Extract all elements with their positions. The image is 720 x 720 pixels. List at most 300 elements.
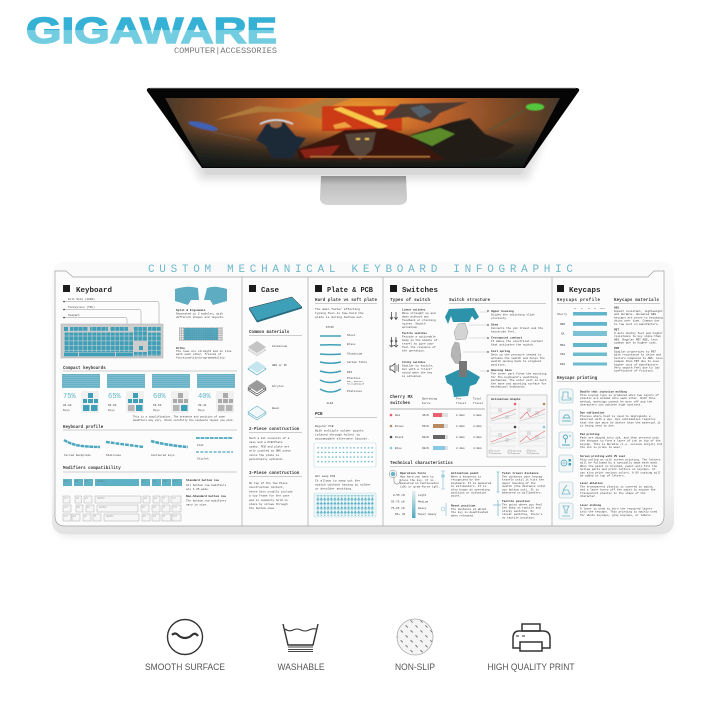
compact size 65 percent: Keys — [108, 409, 115, 412]
keycap materials text: Impact resistant, lightweight — [614, 309, 663, 313]
regular PCB — [314, 424, 376, 467]
switch parts legend: The inner part forms the mounting — [491, 372, 547, 376]
Cherry MX table: Cherry MX — [390, 395, 413, 400]
layout labels: Tenkeyless (TKL) — [68, 305, 95, 309]
ortho keyboard: Ortho — [176, 346, 185, 350]
text: 2-piece: potentially optional. — [249, 457, 284, 461]
tactile switch — [390, 331, 438, 352]
ortho keyboard: The rows are straight and in line — [176, 349, 232, 353]
heading: plate and PCB — [315, 285, 373, 295]
graph legend: position — [532, 453, 539, 455]
icon: smooth surface — [168, 620, 202, 654]
double shot injection molding: plastic are molded onto each other. With this — [580, 396, 656, 400]
total travel distance: you bottom out). It is — [502, 487, 539, 491]
hot swap PCB: Hot swap PCB — [315, 475, 335, 478]
heading: PCB — [315, 413, 377, 418]
laser ablation: and a laser burns off the paint to expose the — [580, 488, 656, 492]
bottom row notes: The bottom row modifiers — [186, 498, 227, 502]
standard bottom row: Menu — [163, 480, 167, 482]
graph: black — [490, 426, 516, 446]
reset position: Reset position — [451, 504, 476, 508]
Cherry MX table: Operating — [422, 396, 437, 400]
pad printing: Pads are dipped into ink, and then pressed onto — [580, 436, 659, 440]
case illustration — [249, 297, 302, 322]
non-standard row B: Win — [153, 506, 156, 508]
linear switch: noises. Smooth — [402, 322, 426, 326]
reset position: when released. — [451, 513, 474, 517]
Cherry MX table: 4.0mm — [473, 414, 482, 417]
activation point: Activation point — [451, 471, 479, 475]
compact size 60 percent — [153, 391, 189, 413]
tactile switch: Provide a noticeable — [402, 334, 436, 338]
force scale: 55-75 cN — [391, 500, 405, 504]
operation force: Operation force — [400, 471, 426, 475]
Cherry MX table: Travel — [473, 401, 483, 405]
plate stiffness chart: STIFF — [326, 326, 335, 329]
Cherry MX table: Brown — [395, 425, 404, 428]
screen printing with UV coat: will be followed by a specially made mesh mask. — [580, 461, 659, 465]
heading: 3-piece construction — [249, 471, 302, 476]
bottom row notes: Non-Standard bottom row — [186, 494, 226, 498]
graph: blue — [519, 426, 545, 446]
keycap materials text: POM — [614, 347, 619, 350]
text: 2-piece: combo. PCB and plate are — [249, 444, 290, 448]
keycap materials text: ABS. Regular PBT ABS, less — [614, 337, 658, 341]
Cherry MX table: 2.0mm — [456, 414, 465, 417]
force scale: 75-95 cN — [391, 507, 405, 510]
heading: 2-piece construction — [249, 427, 302, 432]
feature: washable — [278, 624, 324, 672]
pad printing — [559, 432, 663, 449]
non-standard row A: Win — [76, 498, 79, 500]
switch parts legend: It makes the electrical contact — [491, 339, 543, 343]
text: plate intro: plate is during bottom out. — [315, 315, 364, 319]
monitor with game wallpaper — [147, 88, 579, 205]
heading: case — [249, 285, 280, 295]
split ergonomic keyboard: different shapes and layouts. — [176, 315, 225, 319]
Cherry MX table: 55cN — [422, 425, 429, 428]
heading: plate and PCB: Plate & PCB — [327, 287, 373, 295]
linear switch: actuation. — [402, 325, 419, 329]
text: 3-piece: and is commonly held in — [249, 498, 288, 502]
compact size 60 percent: 60% — [153, 393, 166, 401]
main title: CUSTOM MECHANICAL KEYBOARD INFOGRAPHIC — [148, 264, 573, 276]
non-standard row C: Win — [153, 516, 156, 518]
keycap profile chart: Cherry — [557, 312, 567, 316]
tactile switch: bump in the middle of — [402, 338, 438, 342]
heading: hard vs soft plate: Hard plate vs soft plate — [315, 298, 377, 303]
laser etching — [559, 503, 658, 519]
material: acrylic: Acrylic — [272, 384, 284, 388]
material: acrylic — [248, 380, 284, 396]
keycap profile chart: R3 — [588, 308, 590, 310]
non-standard row C: Spacebar — [106, 516, 114, 518]
text: 2-piece: Such a kit consists of a — [249, 436, 290, 440]
keycap materials text: keycaps are prone to becoming — [614, 315, 663, 319]
total travel distance — [496, 471, 546, 494]
double shot injection molding: method, markings cannot be worn off and the — [580, 399, 652, 403]
screen printing with UV coat: hollow parts and print letters on keycaps. It — [580, 467, 656, 471]
laser etching: A laser is used to burn the required layers — [580, 506, 652, 510]
Cherry MX table: 2.0mm — [456, 425, 465, 428]
Cherry MX table: Force — [422, 402, 431, 405]
heading: switches — [390, 285, 439, 295]
standard bottom row: Alt — [142, 480, 145, 482]
switch parts legend: Guides the switching slide — [491, 312, 535, 316]
plate stiffness chart — [320, 326, 367, 405]
bottom row notes: are 1.25 wide. — [186, 487, 210, 491]
keycap materials text: texture compared to ABS. Less — [614, 356, 663, 360]
compact size 40 percent: 39-41 — [198, 404, 207, 407]
switch parts legend: actuate the switch and helps the — [491, 356, 545, 360]
non-standard row A: Alt — [85, 496, 88, 500]
tactile position: sticky switches. On — [502, 509, 534, 513]
non-standard row C: Fn — [163, 516, 165, 518]
material: wood — [248, 406, 279, 420]
heading: keycaps materials: Keycaps materials — [614, 298, 659, 303]
linear switch: feedback or clicking — [402, 318, 436, 322]
tactile switch: feel the response of — [402, 345, 436, 349]
keycap profile chart: R1 — [574, 308, 576, 310]
non-standard row C: Ctrl — [173, 516, 177, 518]
hot swap PCB — [314, 475, 376, 517]
switch parts legend: mechanism. The outer part is both — [491, 378, 547, 382]
label: high quality print: HIGH QUALITY PRINT — [488, 662, 575, 672]
text: 2-piece: since the plate is — [249, 453, 280, 457]
text: plate intro: The main factor affecting — [315, 307, 360, 311]
switch parts legend: Connects the pin travel and the — [491, 326, 543, 330]
mat shadow — [56, 280, 670, 536]
Cherry MX table: 60cN — [422, 436, 429, 439]
keycap materials text: Similar properties to PBT — [614, 350, 656, 354]
keyboard profile illustrations: Flat — [197, 443, 204, 447]
label: non-slip: NON-SLIP — [395, 662, 435, 672]
graph: brown — [519, 403, 545, 423]
activation point: position or actuation — [451, 490, 487, 494]
screen printing with UV coat: can also print various colors. A UV coating will — [580, 470, 661, 474]
dye sublimation: Dye sublimation — [580, 410, 605, 414]
operation force — [389, 470, 440, 488]
hot swap PCB: It allows to swap out the — [315, 478, 360, 482]
Cherry MX table — [390, 395, 485, 450]
keycap materials text — [614, 306, 663, 373]
Cherry MX table: Travel — [456, 401, 466, 405]
reset position: the key is deactivated — [451, 510, 488, 514]
non-standard row B: Ctrl — [64, 506, 68, 508]
tactile position: linear switches, there's — [502, 512, 543, 516]
Cherry MX table: switches — [390, 401, 411, 406]
pad printing: Pad printing — [580, 432, 600, 436]
heading: 3-piece construction: 3-Piece construction — [249, 471, 300, 476]
keycap materials text: and durable. Uncoated ABS — [614, 312, 656, 316]
standard bottom row — [63, 479, 182, 486]
standard bottom row: Alt — [85, 480, 88, 482]
keycap materials text: A more chalky feel and higher — [614, 331, 663, 335]
text: plate intro: typing feel is how hard the — [315, 311, 364, 315]
standard bottom row: Win — [153, 480, 156, 482]
plate stiffness chart: Aluminium — [347, 352, 362, 356]
clicky switch — [390, 360, 434, 378]
graph legend — [489, 450, 539, 455]
regular PCB: accommodate alternate layouts. — [315, 436, 369, 440]
text: 3-piece: construction content, — [249, 485, 284, 489]
force scale: Medium — [418, 500, 428, 504]
graph legend: position — [494, 453, 501, 455]
text: 2-piece: case and a PCB/Plate — [249, 440, 283, 444]
laser ablation: The transparent plastic is covered in paint, — [580, 484, 654, 488]
switch parts legend: for the keyboard's switching — [491, 375, 538, 379]
total travel distance: upper housing of the — [502, 481, 536, 485]
non-standard row C: Ctrl — [64, 516, 68, 518]
text: 3-piece: a top frame for the case — [249, 494, 290, 498]
keycap profile chart: MSA — [560, 344, 565, 347]
activation point: in millimeters. It is — [451, 484, 487, 488]
screen printing with UV coat — [559, 454, 661, 478]
text: 2-piece: only counted as ONE piece — [249, 449, 291, 453]
heading: technical characteristics: Technical characteristics — [390, 461, 453, 466]
panel: case — [248, 285, 302, 510]
activation point — [441, 471, 492, 498]
switch parts legend: Stem — [491, 324, 498, 326]
keycap materials text: to low cost in manufacture. — [614, 322, 659, 326]
text: 3-piece: the bottom case. — [249, 506, 276, 510]
screen printing with UV coat: Also called as silk screen printing. The letters — [580, 458, 661, 462]
dye sublimation: material with a dye. Dye sublimation requires — [580, 417, 656, 421]
logo: Gigaware — [26, 10, 277, 56]
switch parts legend: switch moving back to original — [491, 359, 542, 363]
label: washable: WASHABLE — [278, 662, 324, 672]
tactile switch: Tactile switches — [402, 331, 427, 335]
plate stiffness chart: Plateless — [347, 389, 362, 393]
switch parts legend: mechanical keyboards. — [491, 385, 526, 389]
keycap materials text: PBT — [614, 328, 619, 332]
Cherry MX table: Red — [395, 413, 400, 417]
feature: smooth surface — [145, 620, 225, 672]
standard bottom row: Ctrl — [173, 480, 177, 482]
text: 3-piece: these kits usually include — [249, 489, 293, 493]
heading: keyboard: Keyboard — [76, 287, 112, 295]
feature: non-slip — [395, 619, 435, 672]
compact size 40 percent: 40% — [198, 393, 211, 401]
non-standard row C: Alt — [84, 514, 87, 518]
keyboard profile illustrations: Staircase — [106, 453, 121, 457]
label: smooth surface: SMOOTH SURFACE — [145, 662, 225, 672]
switch parts legend: the base and mounting surface for — [491, 381, 547, 385]
heading: PCB: PCB — [315, 413, 323, 417]
non-standard row B: Ctrl — [173, 506, 177, 508]
compact size 65 percent — [108, 391, 144, 413]
Cherry MX table: 2.0mm — [456, 436, 465, 439]
panel: keycaps — [557, 285, 663, 519]
heading: case: Case — [261, 287, 280, 295]
dye sublimation: is being used to dye. — [580, 424, 615, 428]
Cherry MX table: 45cN — [422, 414, 429, 417]
compact size 60 percent: 59-64 — [153, 404, 162, 407]
compact size 75 percent: Keys — [63, 409, 70, 412]
compact note: modifiers may vary. Check carefully the keyboard layout you pick. — [133, 418, 234, 422]
keycap materials text: higher cost of manufacture. — [614, 362, 659, 366]
standard bottom row: Ctrl — [64, 480, 68, 482]
laser ablation: Laser ablation — [580, 481, 603, 485]
double shot injection molding: Double shot injection molding — [580, 390, 627, 394]
mouse mat — [52, 262, 674, 536]
keycap materials text: Very smooth feel due to low — [614, 366, 660, 370]
Cherry MX table: 60cN — [422, 447, 429, 450]
force scale: Heavy — [418, 507, 427, 510]
material: ABS or PC: ABS or PC — [272, 364, 287, 367]
plate stiffness chart: Brass — [347, 343, 356, 346]
non-standard row B: Fn — [163, 506, 165, 508]
keyboard profile illustrations: Contoured keys — [151, 453, 175, 457]
tactile position — [493, 499, 543, 519]
laser ablation: transparent plastic in the shape of the — [580, 491, 646, 495]
full size keyboard illustration — [61, 324, 163, 358]
switch parts legend: position. — [491, 362, 506, 366]
plate stiffness chart: Plastics — [347, 376, 361, 380]
logo wordmark: GIGAWARE — [26, 10, 277, 51]
double shot injection molding: characters can achieve high contrast. — [580, 403, 642, 407]
switch parts legend — [463, 309, 547, 389]
ortho keyboard: with each other, friends of — [176, 352, 222, 356]
feature: high quality print — [488, 624, 575, 672]
panel: plate and PCB — [314, 285, 377, 517]
keycap profile chart: R2 — [581, 308, 583, 310]
clicky switch: sound when the key — [402, 370, 433, 374]
activation point: keyboard. It is measured — [451, 481, 492, 485]
graph legend: position — [512, 453, 520, 455]
keyboard profile illustrations: Curved backplate — [64, 453, 91, 457]
total travel distance: The distance your keycap — [502, 474, 543, 478]
activation point: When a keypress is — [451, 474, 482, 478]
heading: keycaps profile: Keycaps profile — [557, 298, 600, 303]
double shot injection molding — [559, 389, 659, 407]
text: 3-piece: place by screws through — [249, 502, 288, 506]
icon: printer — [513, 624, 550, 651]
laser etching: into the keycaps. This printing is mainly used — [580, 510, 658, 514]
heading: common materials: Common materials — [249, 330, 290, 335]
layout labels — [63, 297, 159, 324]
keycap profile chart: XSA — [560, 353, 565, 356]
heading: keycaps — [557, 285, 601, 295]
material: wood: Wood — [272, 406, 279, 410]
Cherry MX table: 4.0mm — [473, 447, 482, 450]
mat base — [52, 262, 674, 534]
heading: modifiers compatibility: Modifiers compatibility — [63, 466, 121, 471]
split ergonomic keyboard: Separated in 2 modules, with — [176, 312, 223, 316]
monitor stand — [320, 176, 407, 205]
Cherry MX table: Blue — [395, 446, 402, 450]
material: aluminium — [248, 341, 287, 356]
plate stiffness chart: ABS, ACRYLIC, — [347, 380, 364, 383]
switch parts legend: precisely. — [491, 316, 508, 320]
activation point: also known as operating — [451, 487, 490, 491]
Cherry MX table: 2.2mm — [456, 447, 465, 450]
tactile switch: travel to give your — [402, 342, 434, 346]
regular PCB: With multiple solder points — [315, 428, 364, 432]
screen printing with UV coat: When the paint is brushed, paint will fill the — [580, 464, 658, 468]
graph legend: Tactile — [494, 450, 500, 452]
heading: keycaps printing — [557, 376, 660, 382]
graph legend: Reset — [532, 450, 536, 452]
Cherry MX table: 4.0mm — [473, 425, 482, 428]
keycap profile chart: SA — [561, 332, 565, 336]
keycap materials text: shiny over time. Common due — [614, 319, 660, 323]
non-standard row C: Win — [73, 516, 76, 518]
keycap materials text: common due to higher cost. — [614, 341, 658, 345]
laser ablation: character. — [580, 494, 597, 498]
compact size 65 percent: 65-68 — [108, 404, 117, 407]
heading: keycaps printing: Keycaps printing — [557, 376, 598, 381]
plate stiffness chart: Steel — [347, 333, 356, 337]
material: aluminium: Aluminium — [272, 344, 287, 348]
non-standard row A: Win — [154, 498, 157, 500]
heading: 2-piece construction: 2-Piece construction — [249, 427, 300, 432]
compact keyboard thumbnails — [62, 374, 235, 388]
keyboard profile illustrations — [64, 438, 233, 460]
linear switch: Linear switches — [402, 308, 426, 312]
pad printing: keycap. This is Durable (i.e. serious inkjet) but — [580, 442, 663, 446]
compact size 75 percent: 86-88 — [63, 404, 72, 407]
clicky switch: is actuated. — [402, 374, 422, 378]
panel: switches — [389, 285, 547, 519]
non-standard row A — [63, 496, 181, 503]
non-standard row A: Alt — [144, 496, 147, 500]
heading: types of switch: Types of switch — [390, 298, 430, 303]
pad printing: the ink is prone to wear. — [580, 445, 622, 449]
tactile position: no tactile position. — [502, 515, 536, 519]
non-standard row B — [63, 505, 181, 512]
black bezel — [147, 88, 579, 168]
force scale: Light — [418, 493, 427, 497]
regular PCB: Regular PCB — [315, 424, 334, 428]
Cherry MX table: Total — [473, 396, 482, 400]
keycap materials text: ABS — [614, 306, 619, 310]
compact size 40 percent — [198, 391, 234, 413]
double shot injection molding: This keycap type is produced when two layers of — [580, 393, 659, 397]
tactile switch: the operation. — [402, 348, 426, 352]
split ergonomic keyboard: Split & Ergonomic — [176, 308, 206, 312]
icon: wash basin — [283, 624, 318, 652]
compact note: This is a simplification. The presence and position of some — [133, 414, 225, 418]
ortho keyboard: functionality/programmability. — [176, 355, 226, 359]
switch exploded diagram — [445, 308, 480, 397]
non-standard row A: Spacebar — [97, 498, 105, 500]
keycap materials text: resistance to key shine than — [614, 334, 661, 338]
silver chin — [202, 168, 525, 175]
compact size 60 percent: Keys — [153, 409, 160, 412]
icon: non-slip texture — [397, 619, 433, 655]
activation point: recognized by the — [451, 478, 480, 482]
ortho keyboard — [176, 327, 232, 359]
keycap profile chart: R4 — [594, 308, 596, 310]
heading: common materials — [249, 330, 302, 336]
total travel distance: measured in millimeters. — [502, 490, 542, 494]
keycap materials text: with resistance to shine and — [614, 353, 661, 357]
bottom row notes — [186, 478, 227, 507]
keycap materials text: coefficient of friction. — [614, 369, 654, 373]
operation force: measured in Centinewton — [400, 481, 439, 485]
compact size 65 percent: 65% — [108, 393, 121, 401]
activation point: point. — [451, 494, 461, 498]
graph: red — [490, 403, 516, 423]
switch parts legend: Sets up the pressure needed to — [491, 352, 542, 356]
screen printing with UV coat: be added on top of letters. — [580, 474, 625, 478]
keycap materials text: common than PBT due to even — [614, 359, 660, 363]
non-standard row C: Alt — [143, 514, 146, 518]
tactile position: The point where you feel — [502, 502, 543, 506]
clicky switch: Clicky switches — [402, 360, 426, 364]
operation force: (cN) or gram-force (gf). — [400, 484, 440, 488]
